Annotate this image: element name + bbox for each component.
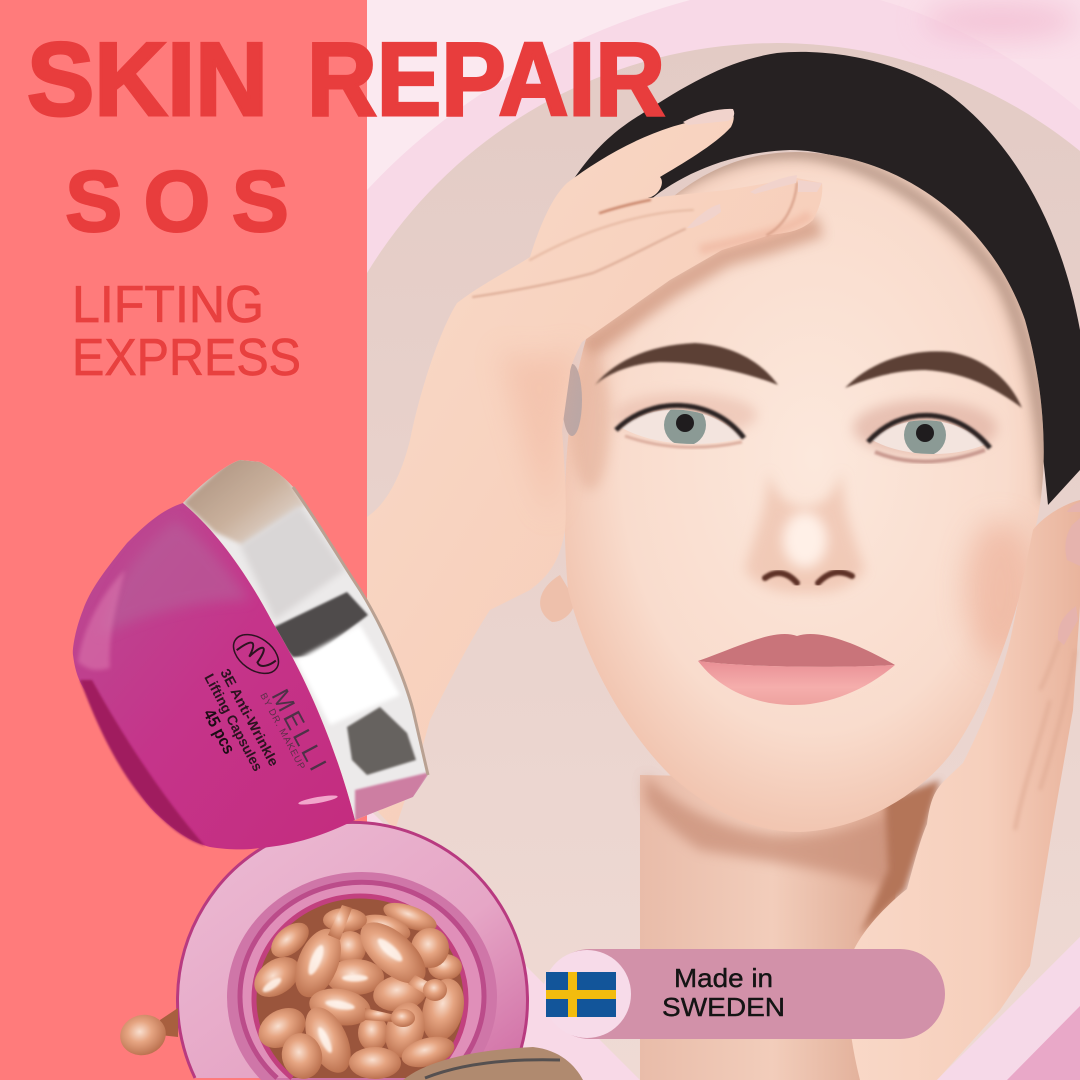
model portrait (367, 52, 1080, 1080)
background: pale upper right arc (880, 0, 1080, 110)
background: beige circle (367, 43, 1080, 1080)
background: lower right pink strip (937, 937, 1080, 1080)
band bronze top (184, 460, 304, 546)
right hand (848, 500, 1080, 1080)
background: pink right side (367, 0, 1080, 1080)
Swedish flag icon (546, 972, 616, 1017)
face (565, 152, 1044, 832)
silver collar at bottom (403, 1047, 583, 1080)
open jar base with capsules (116, 822, 583, 1080)
band white reflection (296, 625, 400, 725)
lid lower dark band (80, 680, 205, 846)
pill background (545, 949, 945, 1039)
hair (573, 52, 1080, 505)
palm warm shading (500, 345, 578, 520)
right hand nails (1058, 502, 1080, 645)
jar well (254, 896, 466, 1078)
neck dark shadow (860, 780, 940, 935)
cheek blush (965, 520, 1035, 660)
band dark reflection lower (347, 707, 416, 775)
finger nails (683, 109, 822, 228)
lid upper muted sheen (100, 520, 250, 635)
badge text: Made in (674, 963, 773, 993)
background: pale upper left arc (367, 0, 690, 190)
finger creases (473, 183, 797, 297)
badge text: SWEDEN (662, 992, 785, 1022)
left eye shadow (613, 393, 757, 437)
background: watercolor corner (922, 2, 1078, 40)
logo mark (226, 627, 286, 681)
raised hand and forearm (367, 110, 822, 830)
badge text (662, 963, 785, 1022)
left brow (595, 343, 778, 385)
subheading: lifting express: LIFTING (72, 276, 264, 334)
jar rim (177, 822, 527, 1078)
title: skin repair: REPAIR (307, 22, 665, 138)
jar lid (73, 450, 440, 849)
background: lower right watercolor (1007, 1006, 1080, 1080)
product name line 2: Lifting Capsules (201, 671, 266, 774)
lips (698, 634, 895, 705)
neck (640, 775, 905, 1080)
product name line 1: 3E Anti-Wrinkle (217, 666, 282, 769)
right eye shadow (853, 400, 997, 456)
jar opening (227, 872, 497, 1080)
heading: SOS: S O S (65, 154, 289, 250)
silver band (183, 460, 428, 820)
jar inner glass ring (240, 882, 484, 1078)
temple shadow (570, 350, 610, 490)
nose side shadows (745, 470, 865, 593)
nose tip (783, 512, 827, 568)
finger shading (700, 215, 810, 250)
finger shadow on forehead (585, 226, 820, 350)
lid left highlight (78, 570, 125, 670)
subheading: lifting express (72, 276, 301, 387)
hidden grey shape by temple (562, 364, 582, 436)
subheading: lifting express: EXPRESS (72, 329, 301, 387)
brand tagline: BY DR. MAKEUP (257, 691, 307, 771)
chin shadow (645, 775, 895, 890)
band bronze rim edge (293, 487, 428, 775)
stray capsule (116, 1008, 178, 1060)
capsule count: 45 pcs (199, 706, 239, 757)
lid bottom highlight (298, 794, 338, 806)
band pink translucent base (355, 772, 430, 825)
right brow (845, 351, 1022, 408)
hairline fade (650, 152, 1048, 500)
lid pink dome (73, 503, 355, 849)
badge: made in Sweden (543, 949, 945, 1039)
title: skin repair: SKIN (27, 22, 268, 138)
background: left coral panel (0, 0, 367, 1080)
right eye (868, 414, 990, 462)
band grey sheen (240, 505, 345, 620)
ear (540, 575, 575, 622)
right hand finger creases (1015, 640, 1075, 830)
capsule highlights (261, 936, 405, 1054)
left eye (616, 404, 744, 447)
flag circle (543, 950, 631, 1038)
band dark reflection upper (268, 592, 368, 657)
capsules (247, 897, 471, 1080)
brand name: MELLI (266, 685, 332, 776)
nostrils (765, 572, 852, 583)
title: skin repair (27, 22, 665, 138)
facial shading, clipped to face (570, 152, 1048, 660)
